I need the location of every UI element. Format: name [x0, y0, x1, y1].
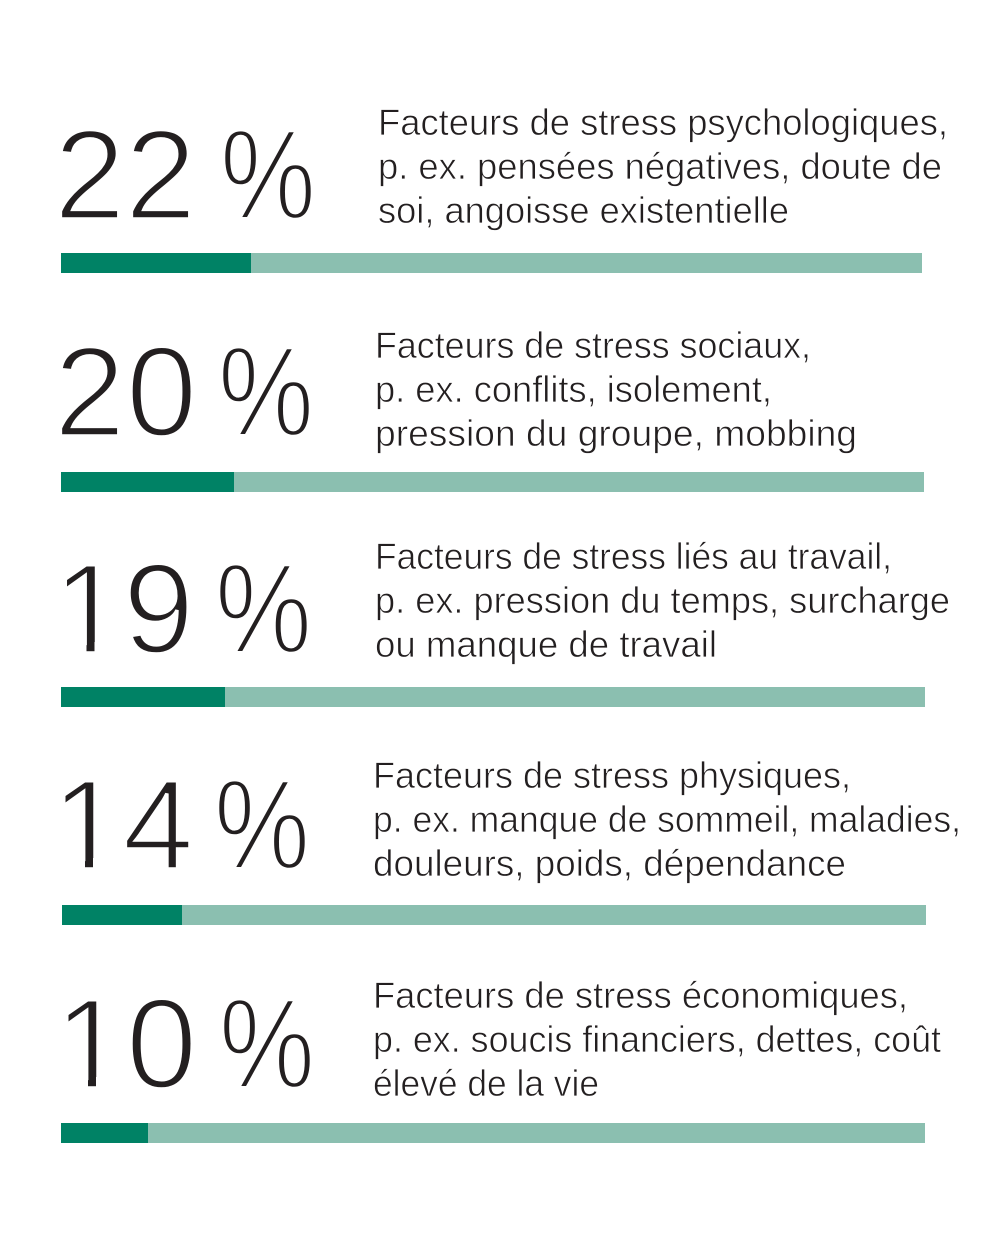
value: 10 %: 10	[54, 973, 197, 1116]
progress bar: 14 %	[62, 905, 926, 925]
row: physical stress factors	[52, 754, 961, 925]
description: economic: élevé de la vie	[373, 1063, 599, 1104]
value: 20 %: 20	[54, 321, 197, 464]
description: work	[375, 536, 950, 665]
description: physical: Facteurs de stress physiques,	[373, 755, 851, 796]
value: 22 %: 22	[54, 104, 196, 247]
description: social	[375, 325, 857, 454]
description: social: p. ex. conflits, isolement,	[375, 369, 772, 410]
value: 19 %: 19	[53, 538, 194, 681]
progress bar: 19 %	[61, 687, 925, 707]
value: 20 %: %	[218, 321, 314, 464]
row: economic stress factors	[54, 973, 942, 1143]
description: psychological: Facteurs de stress psychologiques,	[378, 102, 948, 143]
description: psychological: soi, angoisse existentielle	[378, 190, 789, 231]
value: 22 %	[54, 104, 316, 247]
value: 14 %	[52, 754, 310, 897]
description: work: ou manque de travail	[375, 624, 717, 665]
description: work: Facteurs de stress liés au travail,	[375, 536, 892, 577]
description: physical	[373, 755, 961, 884]
description: economic: p. ex. soucis financiers, dettes, coût	[373, 1019, 942, 1060]
description: economic	[373, 975, 942, 1104]
value: 14 %: 14	[52, 754, 194, 897]
row: work stress factors	[53, 536, 950, 707]
description: psychological	[378, 102, 948, 231]
value: 14 %: %	[214, 754, 310, 897]
row: psychological stress factors	[54, 102, 948, 273]
description: economic: Facteurs de stress économiques,	[373, 975, 908, 1016]
value: 10 %	[54, 973, 315, 1116]
value: 19 %	[53, 538, 312, 681]
value: 22 %: %	[220, 104, 316, 247]
description: physical: p. ex. manque de sommeil, maladies,	[373, 799, 961, 840]
progress bar: 22 %	[61, 253, 922, 273]
description: social: pression du groupe, mobbing	[375, 413, 857, 454]
progress bar: 10 %	[61, 1123, 925, 1143]
description: work: p. ex. pression du temps, surcharge	[375, 580, 950, 621]
description: physical: douleurs, poids, dépendance	[373, 843, 846, 884]
value: 19 %: %	[215, 538, 312, 681]
description: psychological: p. ex. pensées négatives, doute de	[378, 146, 942, 187]
value: 20 %	[54, 321, 314, 464]
progress bar: 20 %	[61, 472, 924, 492]
row: social stress factors	[54, 321, 924, 492]
description: social: Facteurs de stress sociaux,	[375, 325, 811, 366]
value: 10 %: %	[219, 973, 315, 1116]
